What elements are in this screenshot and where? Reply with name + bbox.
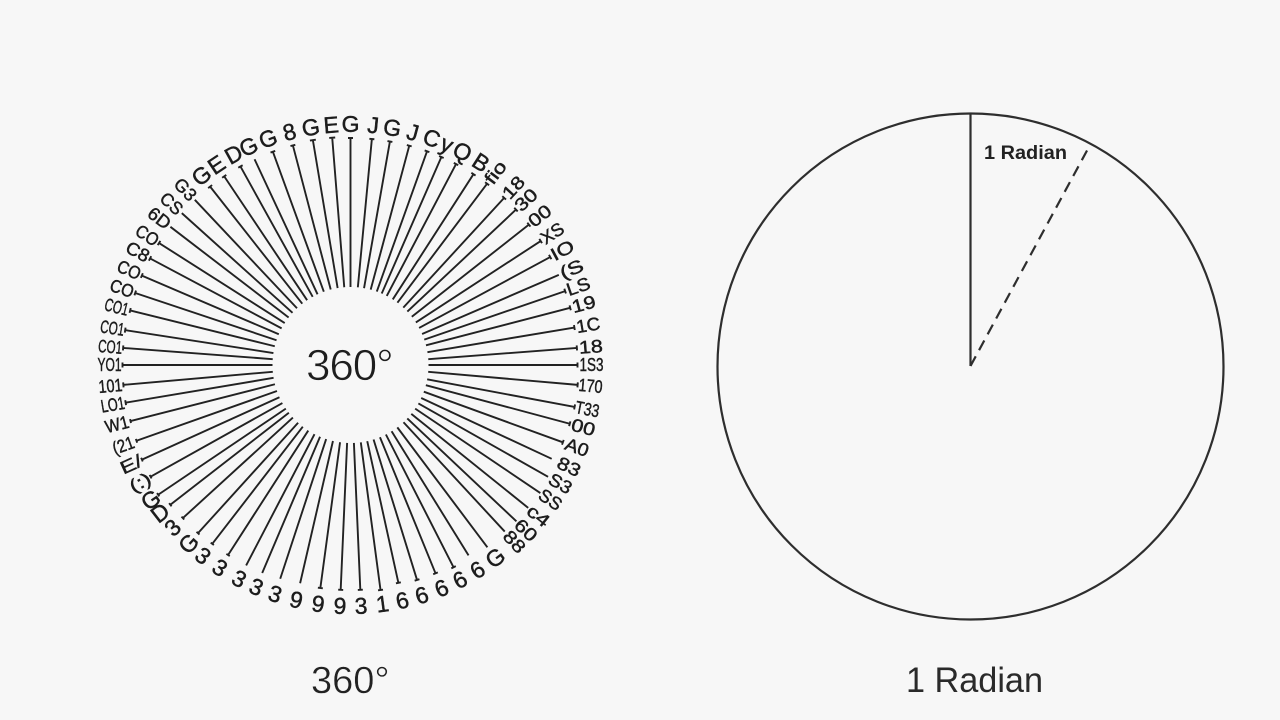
degree tick labels: B: [468, 147, 495, 178]
degree tick labels: CO: [132, 221, 163, 250]
degree tick labels: S3: [545, 469, 576, 498]
degree tick labels: c4: [523, 501, 554, 531]
degree tick labels: (:): [126, 468, 155, 497]
degree tick labels: 3: [245, 572, 267, 601]
degree tick labels: 8: [280, 118, 299, 146]
degree tick labels: CO: [107, 275, 137, 302]
degree tick labels: 83: [554, 453, 584, 481]
degree tick labels: CO: [114, 256, 144, 284]
degree tick labels: [97, 111, 604, 619]
degree tick labels: 9: [333, 593, 347, 619]
degree tick labels: fio: [480, 157, 511, 188]
degree tick labels: 18: [578, 336, 604, 358]
degree tick labels: D: [220, 139, 247, 170]
degree tick labels: 18: [498, 172, 529, 203]
degree tick labels: 00: [569, 415, 597, 440]
degree tick labels: C: [420, 123, 444, 153]
degree tick labels: E/: [117, 451, 145, 478]
degree tick labels: C8: [122, 237, 153, 266]
degree tick labels: G: [342, 111, 359, 137]
degree tick labels: 9: [310, 590, 326, 618]
degree tick labels: 9: [287, 586, 305, 614]
degree tick labels: (21: [110, 432, 137, 459]
degree tick labels: D: [146, 497, 175, 528]
degree tick labels: 3: [354, 593, 368, 619]
degree tick labels: J: [404, 118, 422, 146]
solid radius: [969, 114, 972, 366]
degree tick labels: G: [255, 123, 281, 154]
degree tick labels: 6: [465, 555, 490, 584]
degree tick labels: y: [437, 130, 458, 159]
degree tick labels: A0: [562, 434, 592, 461]
degree tick labels: G: [173, 528, 204, 559]
degree tick labels: LO1: [99, 393, 126, 417]
degree tick labels: G: [480, 542, 510, 573]
degree tick labels: YO1: [98, 355, 122, 375]
spokes: [122, 137, 578, 590]
degree tick labels: IO: [547, 236, 578, 265]
circle outline: [718, 114, 1224, 620]
degree tick labels: 6D: [144, 203, 175, 234]
degree tick labels: 101: [98, 375, 123, 397]
degree tick labels: 170: [578, 375, 603, 397]
degree tick labels: 30: [511, 185, 542, 216]
degree tick labels: (S: [557, 255, 587, 283]
degree tick labels: 60: [510, 515, 541, 546]
degree tick labels: G: [300, 113, 322, 142]
degree tick labels: 3: [159, 514, 186, 541]
degree tick labels: 88: [499, 526, 530, 557]
degree tick labels: 1: [374, 590, 390, 618]
degree tick labels: 6: [448, 565, 472, 594]
degree tick labels: 3: [208, 553, 232, 582]
degree tick labels: 1C: [575, 313, 602, 337]
degree tick labels: 3: [228, 564, 251, 593]
degree tick labels: SS: [535, 485, 566, 515]
degree tick labels: CO1: [97, 336, 123, 358]
degree tick labels: J: [366, 112, 380, 139]
degree tick labels: T33: [574, 397, 601, 421]
degree tick labels: 00: [524, 201, 556, 231]
wheel center label: 360°: [306, 341, 393, 390]
degree tick labels: 6: [412, 581, 432, 610]
degree tick labels: G3: [170, 174, 201, 205]
degree tick labels: E: [322, 111, 340, 138]
panel: one radian circle: [718, 114, 1224, 620]
dashed radius: [970, 145, 1090, 366]
degree tick labels: 19: [570, 292, 598, 317]
degree tick labels: 1S3: [580, 355, 604, 375]
degree tick labels: 6: [431, 574, 452, 603]
caption: 360 degrees: 360°: [311, 660, 390, 702]
arc label: 1 Radian: [984, 143, 1067, 164]
degree tick labels: CO1: [99, 316, 126, 340]
degree tick labels: 6: [393, 586, 411, 614]
degree tick labels: XS: [537, 218, 568, 248]
degree tick labels: CO1: [103, 295, 131, 320]
degree tick labels: CS: [156, 188, 187, 219]
degree tick labels: Q: [449, 136, 476, 167]
degree tick labels: E: [203, 150, 230, 180]
caption: 1 radian: 1 Radian: [906, 661, 1043, 700]
degree tick labels: 3: [190, 541, 216, 570]
degree tick labels: G: [235, 131, 262, 162]
degree tick labels: W1: [103, 412, 131, 437]
degree tick labels: 3: [265, 580, 285, 608]
degree tick labels: LS: [564, 273, 593, 300]
degree tick labels: G: [136, 484, 165, 516]
degree tick labels: G: [381, 113, 403, 142]
panel: 360 degree spoke wheel: [97, 111, 604, 619]
degree tick labels: G: [186, 160, 217, 191]
